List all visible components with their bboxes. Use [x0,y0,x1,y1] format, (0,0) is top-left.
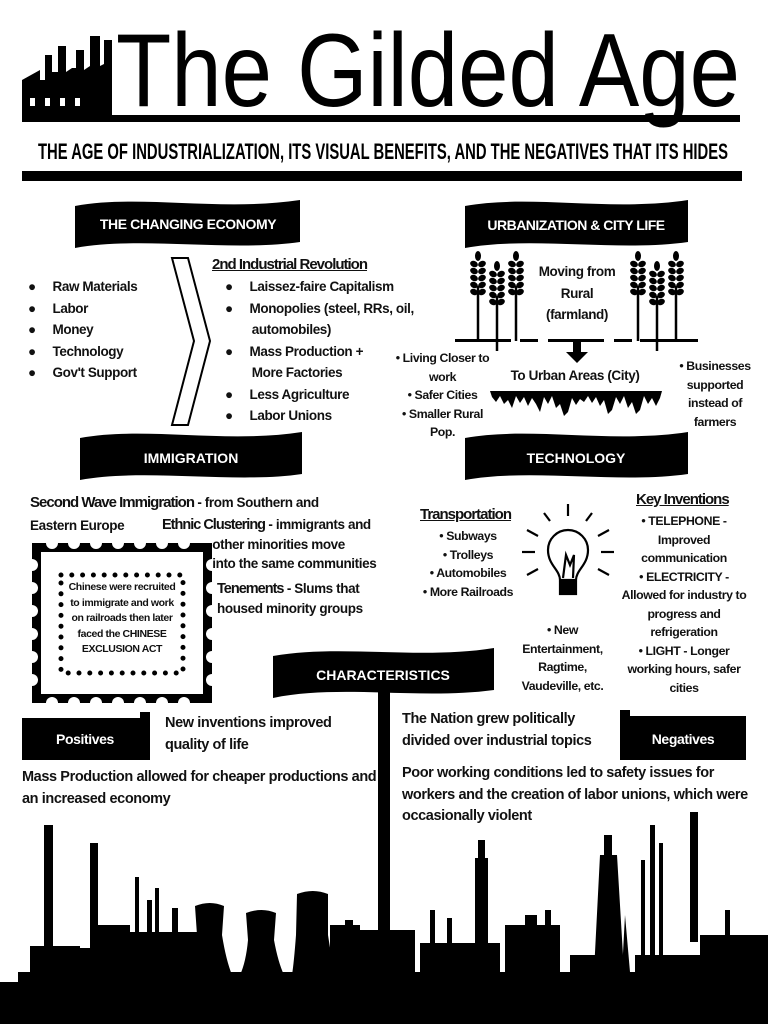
text: tenements: Tenements - Slums that [217,581,359,597]
list: 2nd industrial revolution: automobiles) [252,322,331,337]
icon: light bulb [522,504,614,594]
ground line [455,339,698,342]
text: new entertainment: Vaudeville, etc. [522,678,603,692]
list: key inventions: • ELECTRICITY - [639,570,729,584]
list: 2nd industrial revolution: ● Mass Production + [225,344,363,358]
text: negatives working conditions: Poor working conditions led to safety issues for [402,765,714,781]
text: new entertainment: • New [547,623,578,637]
banner: immigration: IMMIGRATION [144,450,238,466]
banner: the changing economy: THE CHANGING ECONOMY [100,216,277,232]
text: negatives working conditions [402,765,748,824]
list: 2nd industrial revolution: ● Less Agriculture [225,386,349,402]
list: 2nd industrial revolution: More Factories [252,365,342,380]
text: moving from rural: (farmland) [546,307,608,322]
list: key inventions: working hours, safer [628,662,740,676]
list: economy inputs: ● Money [28,322,93,337]
list: key inventions: • LIGHT - Longer [639,644,729,658]
list: transportation: • More Railroads [423,584,513,598]
text: stamp chinese exclusion: to immigrate and work [70,596,174,608]
text: new entertainment: Entertainment, [522,642,603,656]
list: transportation: • Automobiles [430,566,506,580]
text: moving from rural: Rural [561,286,593,300]
banner: technology: TECHNOLOGY [527,450,626,466]
text: urban benefits right: supported [687,378,743,392]
text: negatives working conditions: occasionally violent [402,808,532,824]
text: new entertainment [522,623,603,692]
text: urban benefits left: • Smaller Rural [402,406,483,420]
text: urban benefits left: Pop. [430,425,455,439]
flag: characteristics [273,648,494,950]
list: 2nd industrial revolution [225,279,414,423]
text: ethnic clustering [162,517,376,571]
text: second wave immigration: Second Wave Immigration - from Southern and [30,494,319,511]
text: Eastern Europe [30,518,124,533]
text: moving from rural: Moving from [539,264,615,279]
text: ethnic clustering: into the same communities [212,556,376,571]
list: key inventions: Improved [658,532,710,546]
text: negatives divided: divided over industrial topics [402,732,591,748]
icon: factory [22,36,112,122]
text: positives inventions: New inventions improved [165,715,331,731]
text: positives mass production: an increased economy [22,790,170,806]
text: urban benefits right [679,359,751,428]
banner: urbanization: URBANIZATION & CITY LIFE [487,217,665,233]
list: 2nd industrial revolution: ● Labor Unions [225,408,332,423]
text: urban benefits left: work [429,370,456,384]
list: economy inputs: ● Gov't Support [28,365,137,380]
icon: stamp [26,537,218,709]
text: urban benefits left: • Living Closer to [396,351,489,365]
list: key inventions: communication [641,551,727,565]
list: transportation: • Subways [439,529,497,543]
text: moving from rural [539,264,615,322]
heading: transportation: Transportation [420,506,511,523]
text: stamp chinese exclusion: Chinese were recruited [69,581,175,593]
arrow: down [566,342,588,363]
text: urban benefits right: farmers [694,414,736,428]
banner: the changing economy [75,200,300,248]
banner: negatives: Negatives [652,731,715,747]
text: stamp chinese exclusion: faced the CHINESE [78,628,166,640]
icon: wheat left [469,251,525,351]
text: stamp chinese exclusion [69,581,176,655]
list: key inventions: progress and [647,606,721,620]
list: key inventions: cities [669,680,699,694]
text: positives mass production [22,769,376,806]
list: transportation [423,529,513,598]
banner: positives: Positives [56,731,115,747]
text: urban benefits right: • Businesses [679,359,751,373]
arrow: chevron [172,258,210,425]
icon: city skyline [490,391,662,416]
heading: 2nd industrial revolution: 2nd Industrial Revolution [212,256,367,273]
text: urban benefits left [396,351,490,439]
flag: characteristics: CHARACTERISTICS [316,667,450,683]
text: positives inventions [165,715,331,752]
text: urban benefits right: instead of [688,396,742,410]
banner: technology [465,432,688,480]
heading: key inventions: Key Inventions [636,491,729,508]
text: tenements: housed minority groups [217,601,363,616]
list: transportation: • Trolleys [443,548,493,562]
list: economy inputs: ● Labor [28,300,88,316]
text: stamp chinese exclusion: EXCLUSION ACT [82,643,162,655]
list: 2nd industrial revolution: ● Laissez-faire Capitalism [225,279,394,294]
banner: positives [22,712,150,760]
text: tenements [217,581,363,616]
list: key inventions: refrigeration [650,625,718,639]
banner: immigration [80,432,302,480]
text: ethnic clustering: Ethnic Clustering - immigrants and [162,517,371,533]
text: new entertainment: Ragtime, [538,660,587,674]
text: positives inventions: quality of life [165,736,248,752]
banner: negatives [620,710,746,760]
text: negatives divided: The Nation grew politically [402,711,575,727]
text: negatives divided [402,711,592,748]
list: economy inputs: ● Technology [28,344,123,358]
text: negatives working conditions: workers and the creation of labor unions, which were [402,786,748,802]
text: positives mass production: Mass Production allowed for cheaper productions and [22,769,376,785]
text: stamp chinese exclusion: on railroads then later [71,612,173,624]
list: economy inputs [28,279,138,380]
list: economy inputs: ● Raw Materials [28,279,137,294]
text: ethnic clustering: other minorities move [212,537,345,552]
industrial skyline [0,812,768,1024]
icon: wheat right [629,251,685,351]
text: urban benefits left: • Safer Cities [408,388,477,402]
list: key inventions: Allowed for industry to [622,588,746,602]
list: 2nd industrial revolution: ● Monopolies (steel, RRs, oil, [225,300,414,316]
list: key inventions [622,514,746,694]
text: to urban areas: To Urban Areas (City) [511,368,639,383]
list: key inventions: • TELEPHONE - [641,514,727,528]
banner: urbanization [465,200,688,248]
